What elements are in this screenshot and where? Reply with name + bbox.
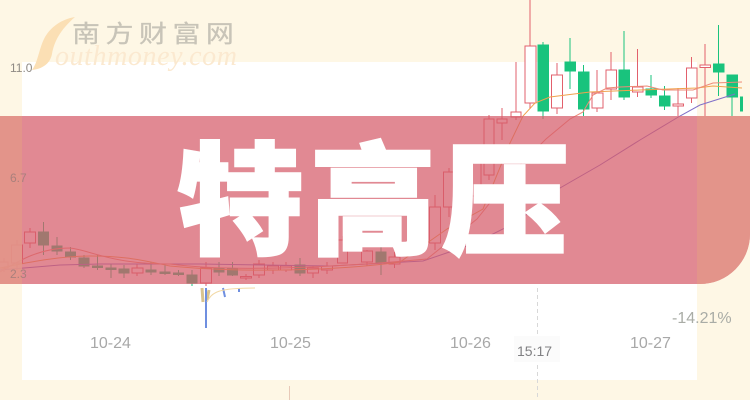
- band side tints: [0, 116, 750, 284]
- panel: white chart background: [22, 62, 697, 380]
- y axis labels: [10, 61, 33, 281]
- rising candles: [0, 0, 710, 286]
- icon: logo swoosh: [32, 17, 75, 70]
- x axis labels: 10-24: [90, 335, 131, 352]
- y axis labels: 6.7: [10, 171, 27, 185]
- x axis labels: [90, 335, 671, 352]
- x axis labels: 10-25: [270, 335, 311, 352]
- percent label: -14.21%: [672, 310, 732, 327]
- band: pink title banner: [0, 116, 750, 284]
- watermark URL: outhmoney.com: [55, 41, 237, 72]
- x axis labels: 10-26: [450, 335, 491, 352]
- x axis labels: 10-27: [630, 335, 671, 352]
- chart: moving average lines: [0, 82, 742, 272]
- logo watermark: [32, 15, 239, 72]
- falling candles: [38, 25, 742, 286]
- chart: lower indicator spikes: [202, 288, 255, 328]
- y axis labels: 11.0: [10, 61, 33, 75]
- title: 特高压: [177, 103, 568, 280]
- y axis labels: 2.3: [10, 267, 27, 281]
- chart: candlesticks: [0, 0, 742, 286]
- tick mark: [288, 386, 290, 400]
- time label: [514, 336, 560, 362]
- time label: 15:17: [517, 343, 552, 359]
- watermark Chinese name: 南方财富网: [72, 15, 239, 49]
- crosshair: dashed time marker: [536, 288, 538, 400]
